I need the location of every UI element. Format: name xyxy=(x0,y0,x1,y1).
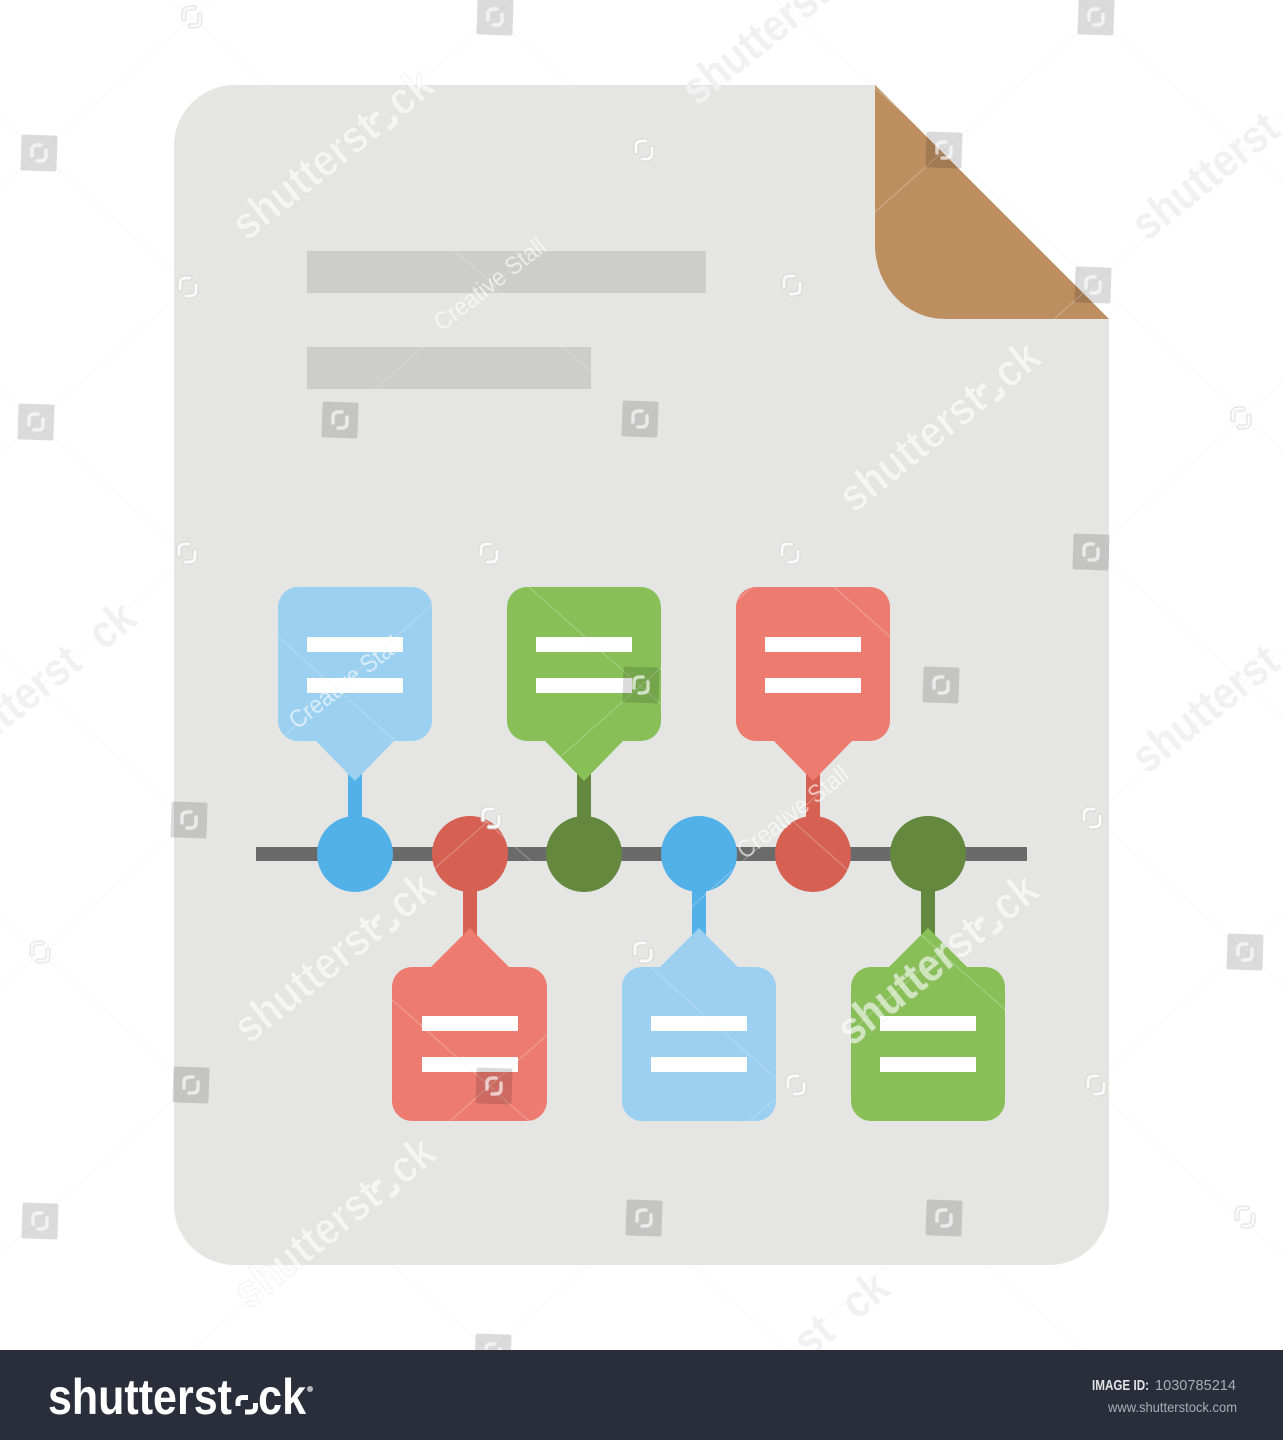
watermarks on white background: stock xyxy=(783,1260,898,1367)
watermarks on page: shutterstock xyxy=(223,1125,445,1318)
watermarks on page: shutterstock xyxy=(223,860,445,1053)
contributor watermarks: Creative Stall xyxy=(731,760,854,865)
watermarks on page xyxy=(221,57,1050,1318)
document page xyxy=(174,85,1109,1265)
contributor watermarks: Creative Stall xyxy=(428,232,551,337)
footer bar xyxy=(0,1350,1283,1440)
watermarks on page: shutterstock xyxy=(828,329,1050,522)
title placeholder bars xyxy=(307,251,706,389)
watermarks on page: shutterstock xyxy=(221,57,443,250)
image id: 1030785214 xyxy=(1155,1377,1236,1394)
timeline axis xyxy=(256,847,1027,861)
contributor watermarks: Creative Stall xyxy=(283,630,406,735)
timeline step 2: red bottom xyxy=(392,816,547,1121)
contributor watermarks xyxy=(283,232,854,865)
timeline step 1: blue top xyxy=(278,587,432,892)
website: www.shutterstock.com xyxy=(1107,1399,1237,1415)
folded corner xyxy=(875,85,1109,319)
timeline step 4: blue bottom xyxy=(622,816,776,1121)
timeline step 6: green bottom xyxy=(851,816,1005,1121)
timeline step 5: red top xyxy=(736,587,890,892)
watermarks on page: shutterstock xyxy=(826,862,1048,1055)
footer logo: shutterstock xyxy=(48,1369,306,1425)
timeline step 3: green top xyxy=(507,587,661,892)
image id: IMAGE ID: xyxy=(1092,1377,1149,1394)
